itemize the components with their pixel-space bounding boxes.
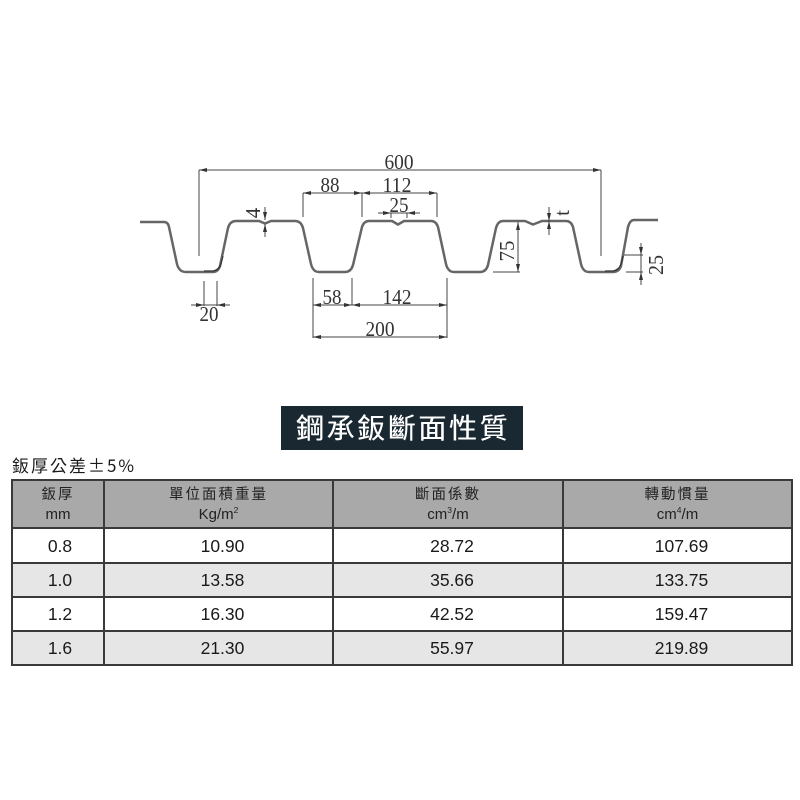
properties table [11,479,793,666]
properties table: 1.2 [48,604,72,624]
properties table: cm4/m [657,504,698,522]
dimension labels: 58 [322,285,342,309]
properties table: 鈑厚 [42,486,74,502]
properties table: 42.52 [430,604,474,624]
title banner [281,406,523,450]
properties table: Kg/m2 [199,504,238,522]
properties table: 1.6 [48,638,72,658]
dimension labels: 25 [390,193,408,217]
properties table: 107.69 [655,536,708,556]
properties table: 28.72 [430,536,474,556]
properties table: 16.30 [201,604,244,624]
tolerance note: 鈑厚公差±5% [12,452,136,477]
properties table: 10.90 [201,536,244,556]
dimension labels: 88 [320,173,340,197]
profile cross-section drawing [140,150,668,341]
properties table: 159.47 [655,604,708,624]
dimension labels: 112 [382,173,412,197]
dimension labels: 142 [382,285,412,309]
properties table: 219.89 [655,638,708,658]
properties table: 斷面係數 [415,486,481,502]
properties table: cm3/m [427,504,469,522]
properties table: 0.8 [48,536,72,556]
properties table: 133.75 [655,570,708,590]
dimension labels: 75 [495,240,519,262]
properties table: mm [46,506,70,522]
properties table: 轉動慣量 [644,486,710,502]
properties table: 1.0 [48,570,72,590]
dimension labels: 25 [644,255,668,275]
properties table: 55.97 [430,638,474,658]
dimension labels: t [550,210,574,216]
dimension labels: 20 [200,302,218,326]
properties table: 13.58 [201,570,244,590]
dimension lines [191,170,643,338]
dimension labels: 200 [366,317,394,341]
properties table: 單位面積重量 [169,486,268,502]
title banner: 鋼承鈑斷面性質 [296,413,510,444]
properties table: 35.66 [430,570,474,590]
dimension labels: 4 [241,207,265,218]
dimension labels [200,150,668,341]
dimension labels: 600 [384,150,414,174]
properties table: 21.30 [201,638,244,658]
steel deck profile [140,220,658,272]
